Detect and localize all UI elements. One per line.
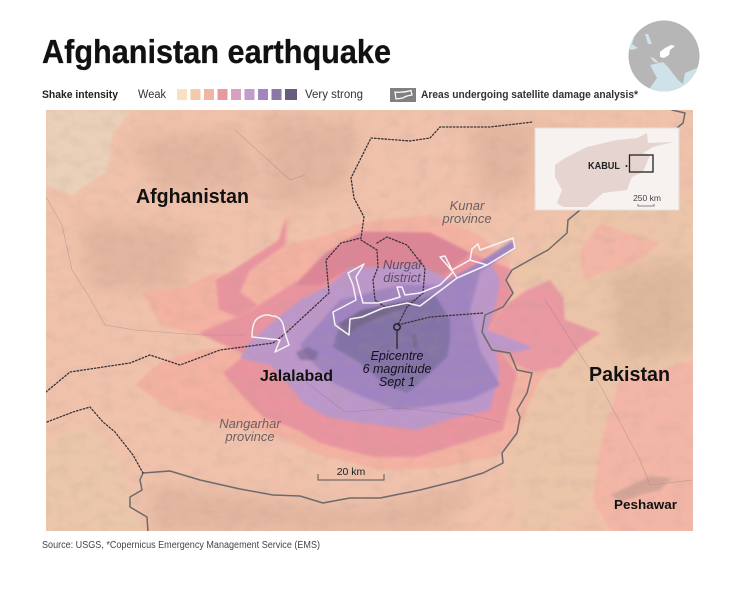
- epicentre marker: [394, 324, 400, 349]
- province and district boundaries: [46, 122, 533, 473]
- inset: Afghanistan shape: [555, 133, 673, 207]
- label: Kunar province: Kunar: [450, 198, 485, 213]
- label: Nurgal district: district: [383, 270, 422, 285]
- inset: Kabul label: KABUL: [588, 161, 620, 172]
- label: Epicentre: 6 magnitude: [363, 362, 431, 376]
- city area: Jalalabad: [296, 347, 318, 360]
- label: Peshawar: Peshawar: [614, 497, 677, 512]
- darkest intensity core: [338, 298, 420, 348]
- city area: Peshawar: [610, 476, 672, 502]
- strong purple intensity band: [333, 295, 450, 393]
- mountain shading: [80, 115, 693, 531]
- hillshade terrain texture: [46, 110, 693, 531]
- label: Kunar province: province: [441, 211, 492, 226]
- label: Epicentre: Sept 1: [379, 375, 415, 389]
- inset: scale bar: [634, 195, 660, 206]
- inset: Kabul dot: [626, 165, 628, 167]
- legend: satellite damage areas: Areas undergoing satellite damage analysis*: [421, 89, 639, 101]
- scale bar: 20 km: [318, 466, 384, 480]
- inset: scale bar: 250 km: [633, 193, 661, 203]
- strong pink intensity band: [199, 232, 517, 457]
- salmon intensity band: [135, 215, 570, 470]
- legend: shake intensity: Shake intensity: [42, 89, 119, 101]
- legend: shake intensity: [42, 89, 363, 101]
- deep pink upper band: [296, 232, 470, 285]
- damage analysis outlines: [252, 238, 515, 352]
- thin roads and rivers: [46, 130, 693, 485]
- locator globe: [628, 20, 700, 92]
- title: Afghanistan earthquake: [42, 33, 391, 70]
- label: Nurgal district: Nurgal: [383, 257, 422, 272]
- label: Epicentre: Epicentre: [371, 349, 423, 363]
- label: Nangarhar province: Nangarhar: [219, 416, 281, 431]
- salmon patches in Pakistan: [580, 223, 693, 531]
- pink river valley: [216, 217, 286, 318]
- inset locator map: [535, 128, 679, 210]
- medium purple intensity band: [300, 240, 515, 410]
- light purple intensity band: [240, 262, 533, 430]
- inset: location rectangle: [630, 155, 653, 172]
- label: Jalalabad: Jalalabad: [260, 368, 333, 385]
- legend: shake intensity: Weak: [138, 89, 166, 101]
- international border: [130, 110, 685, 532]
- scale bar: 20 km: 20 km: [337, 466, 366, 478]
- label: Pakistan: Pakistan: [589, 364, 670, 386]
- weak shaking terrain patches: [46, 110, 128, 194]
- source note: Source: USGS, *Copernicus Emergency Management Service (EMS): [42, 540, 320, 551]
- legend: shake intensity: Very strong: [305, 89, 363, 101]
- map: [46, 110, 693, 532]
- pink patch in Pakistan: [487, 280, 600, 372]
- label: Nangarhar province: province: [224, 429, 275, 444]
- label: Afghanistan: Afghanistan: [136, 186, 249, 208]
